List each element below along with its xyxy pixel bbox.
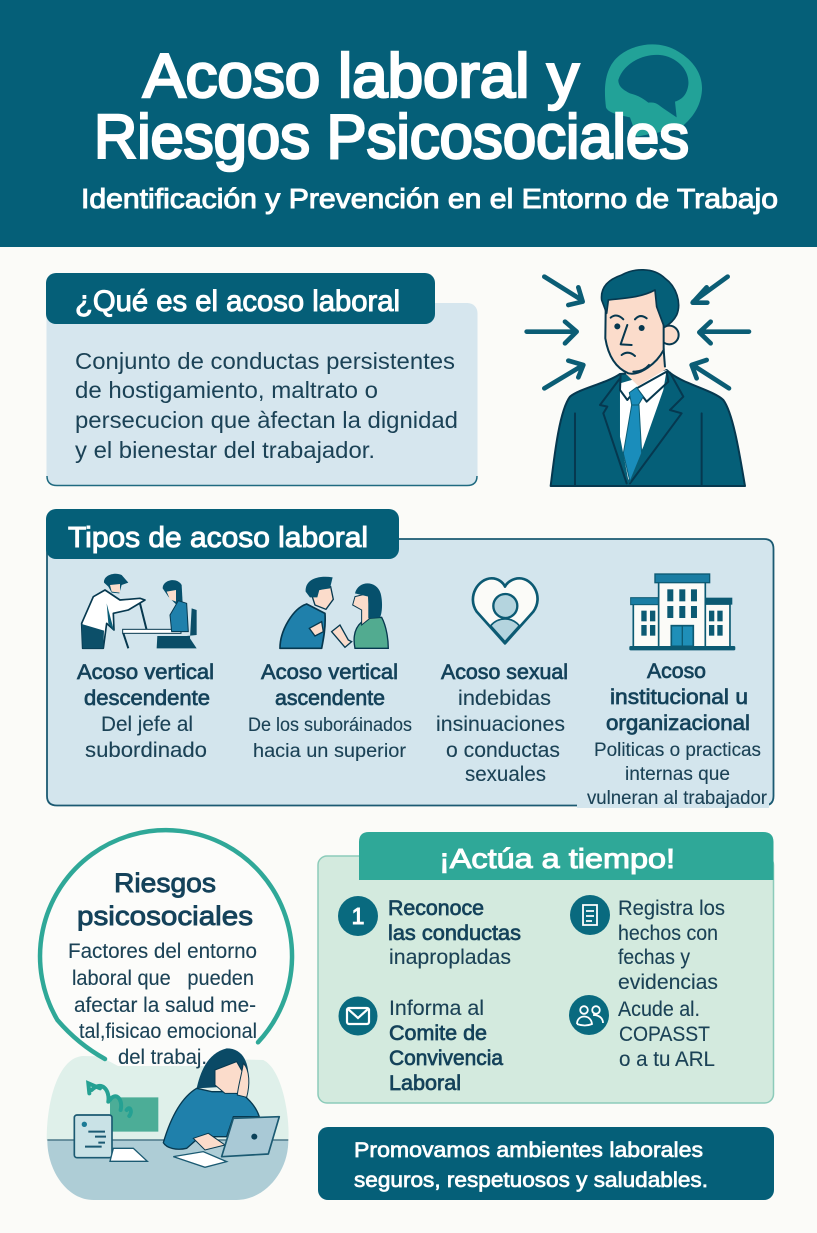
subtitle: Identificación y Prevención en el Entorno de Trabajo bbox=[81, 183, 778, 214]
type: vertical ascendente: hacia un superior bbox=[253, 741, 407, 762]
step: acude: COPASST bbox=[619, 1023, 710, 1046]
step: reconoce bbox=[338, 896, 521, 969]
type: institucional: institucional u bbox=[610, 686, 748, 709]
step: acude bbox=[569, 995, 715, 1071]
closing banner: seguros, respetuosos y saludables. bbox=[354, 1169, 708, 1192]
bubble text: del trabaj. bbox=[118, 1046, 207, 1069]
title bbox=[94, 42, 689, 172]
heading tab: ¿Qué es el acoso laboral bbox=[75, 285, 400, 318]
icon: brain in head bbox=[605, 44, 702, 137]
bubble text: afectar la salud me- bbox=[74, 994, 256, 1017]
step: reconoce: las conductas bbox=[388, 922, 521, 945]
type: vertical descendente: Acoso vertical bbox=[77, 661, 214, 684]
step: informa: Convivencia bbox=[389, 1047, 503, 1070]
type: sexual: sexuales bbox=[465, 763, 546, 786]
icon: boss pointing at subordinate bbox=[82, 574, 197, 648]
definition text: Conjunto de conductas persistentes bbox=[75, 348, 455, 374]
type: institucional: internas que bbox=[625, 764, 730, 785]
step: informa bbox=[338, 996, 503, 1095]
type: vertical descendente bbox=[77, 661, 214, 762]
icon: office building bbox=[629, 574, 735, 650]
type: vertical ascendente: Acoso vertical bbox=[261, 661, 398, 684]
step: reconoce: 1 bbox=[352, 903, 364, 929]
type: sexual: Acoso sexual bbox=[441, 661, 568, 684]
header banner bbox=[0, 0, 817, 247]
heading tab bbox=[46, 273, 435, 324]
step: reconoce: inapropladas bbox=[389, 946, 511, 969]
type: institucional: vulneran al trabajador bbox=[587, 788, 768, 809]
bubble text: Factores del entorno bbox=[68, 940, 257, 963]
type: sexual: o conductas bbox=[446, 739, 560, 762]
bubble heading bbox=[77, 868, 253, 931]
panel: que es el acoso laboral bbox=[46, 273, 478, 486]
heading tab bbox=[359, 832, 774, 880]
definition text: de hostigamiento, maltrato o bbox=[75, 377, 378, 403]
type: institucional: organizacional bbox=[606, 712, 750, 735]
panel: riesgos psicosociales bbox=[40, 830, 292, 1200]
panel: actua a tiempo bbox=[318, 832, 774, 1103]
step: registra: fechas y bbox=[618, 946, 690, 969]
title: Acoso laboral y bbox=[143, 42, 579, 111]
heading tab: ¡Actúa a tiempo! bbox=[439, 843, 675, 874]
type: institucional: Acoso bbox=[647, 660, 706, 683]
bubble text bbox=[68, 940, 257, 1069]
bubble heading: psicosociales bbox=[77, 901, 253, 931]
step: registra: Registra los bbox=[618, 897, 725, 920]
type: vertical descendente: subordinado bbox=[85, 739, 207, 762]
heading tab bbox=[46, 509, 399, 559]
type: vertical descendente: Del jefe al bbox=[101, 713, 193, 736]
title: Riesgos Psicosociales bbox=[94, 103, 689, 172]
bubble heading: Riesgos bbox=[114, 868, 216, 898]
illustration: overwhelmed woman at laptop bbox=[47, 1056, 289, 1200]
closing banner bbox=[318, 1127, 774, 1200]
heading tab: Tipos de acoso laboral bbox=[68, 522, 368, 554]
type: vertical descendente: descendente bbox=[84, 687, 210, 710]
type: vertical ascendente bbox=[248, 661, 412, 762]
step: acude: Acude al. bbox=[618, 998, 700, 1021]
type: sexual: indebidas bbox=[458, 687, 551, 710]
definition text bbox=[75, 348, 458, 463]
definition text: persecucion que àfectan la dignidad bbox=[75, 407, 458, 433]
icon: heart with person bbox=[473, 578, 538, 643]
type: sexual: insinuaciones bbox=[436, 713, 565, 736]
type: vertical ascendente: De los suboráinados bbox=[248, 715, 412, 736]
step: informa: Comite de bbox=[389, 1022, 487, 1045]
step: reconoce: Reconoce bbox=[388, 897, 484, 920]
type: institucional bbox=[577, 660, 769, 809]
type: sexual bbox=[436, 661, 568, 786]
step: informa: Informa al bbox=[389, 997, 484, 1020]
bubble text: tal,fisicao emocional bbox=[79, 1020, 257, 1043]
desk items and woman bbox=[74, 1048, 279, 1167]
type: vertical ascendente: ascendente bbox=[275, 687, 385, 710]
panel: tipos de acoso laboral bbox=[46, 509, 774, 809]
step: registra bbox=[570, 895, 725, 994]
step: acude: o a tu ARL bbox=[619, 1048, 715, 1071]
step: registra: hechos con bbox=[618, 922, 718, 945]
bubble text: laboral que pueden bbox=[72, 967, 254, 990]
type: institucional: Politicas o practicas bbox=[594, 740, 761, 761]
definition text: y el bienestar del trabajador. bbox=[75, 437, 375, 463]
icon: employee and superior arguing bbox=[280, 577, 388, 648]
step: informa: Laboral bbox=[389, 1072, 461, 1095]
illustration: stressed worker with arrows bbox=[527, 270, 749, 486]
speech bubble bbox=[40, 830, 292, 1066]
step: registra: evidencias bbox=[618, 971, 718, 994]
closing banner: Promovamos ambientes laborales bbox=[354, 1139, 703, 1162]
